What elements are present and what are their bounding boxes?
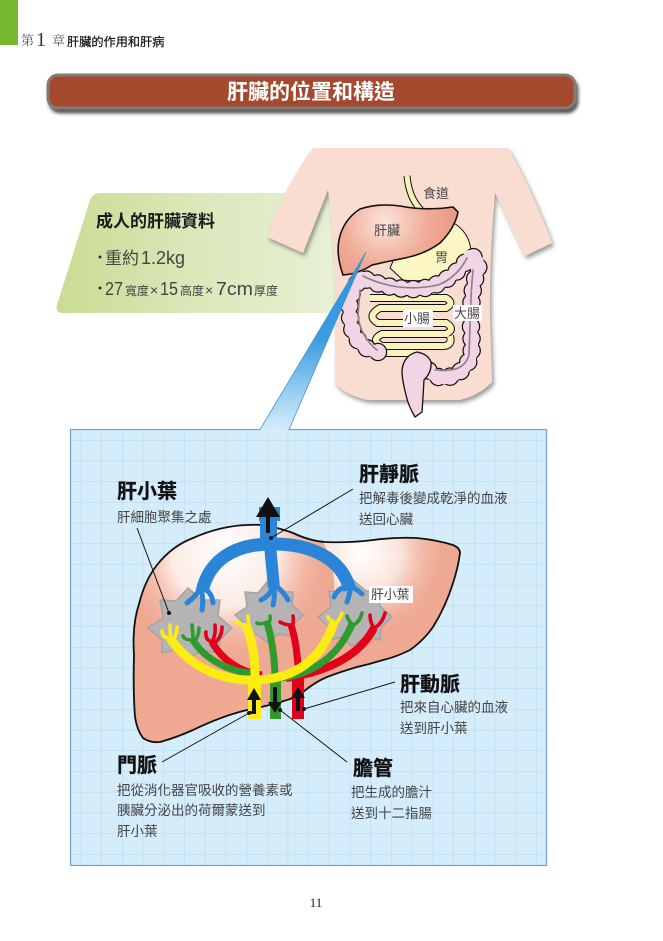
label: bile duct	[351, 756, 432, 821]
size line: 高度	[180, 283, 204, 298]
label: hepatic vein	[359, 463, 508, 527]
panel: liver detail	[70, 252, 546, 866]
lobule: right	[318, 580, 392, 646]
callout wedge from liver	[260, 252, 366, 430]
hepatic vein	[187, 507, 362, 610]
label: hepatic artery: 肝動脈	[400, 673, 460, 696]
vessels: yellow	[162, 613, 342, 719]
heading: adult liver data: 成人的肝臟資料	[96, 211, 215, 231]
chapter heading: 1	[36, 29, 46, 51]
green chapter tab	[0, 0, 18, 45]
organ label: large intestine: 大腸	[454, 306, 480, 321]
label: portal vein: 胰臟分泌出的荷爾蒙送到	[117, 803, 266, 818]
vessels: red	[206, 613, 385, 719]
organ label: small intestine: 小腸	[404, 311, 430, 326]
chapter heading: 肝臟的作用和肝病	[67, 34, 164, 49]
weight line: 1.2kg	[141, 248, 185, 268]
body silhouette	[267, 148, 552, 400]
label: lobule: 肝細胞聚集之處	[117, 510, 212, 525]
rectum	[402, 352, 431, 417]
title banner	[48, 75, 575, 108]
label: bile duct: 膽管	[353, 756, 393, 780]
chapter heading	[21, 29, 164, 51]
label: hepatic artery: 送到肝小葉	[400, 721, 468, 736]
label: portal vein: 把從消化器官吸收的營養素或	[117, 783, 292, 798]
arrow: bile duct down	[268, 687, 282, 713]
size line: 7cm	[216, 279, 253, 299]
label: lobule: 肝小葉	[117, 480, 177, 503]
label: portal vein: 肝小葉	[117, 824, 158, 839]
size line: 厚度	[254, 283, 278, 298]
size line: 15	[160, 279, 178, 299]
organ label: liver: 肝臟	[374, 223, 400, 238]
arrow: hepatic vein up	[256, 497, 280, 533]
label: hepatic vein: 送回心臟	[359, 512, 413, 527]
organ label: esophagus: 食道	[423, 186, 449, 201]
lobule: centre	[235, 582, 303, 642]
small liver	[338, 205, 458, 275]
panel: adult liver data	[57, 193, 345, 313]
size line: ×	[150, 282, 158, 298]
label: bile duct: 把生成的膽汁	[351, 785, 432, 800]
label: hepatic artery: 把來自心臟的血液	[400, 700, 508, 715]
stomach	[390, 222, 471, 281]
weight line: 重約	[105, 249, 139, 268]
organ label: stomach: 胃	[435, 250, 448, 265]
arrow: portal vein up	[247, 688, 261, 714]
small lobule label: 肝小葉	[371, 587, 410, 602]
lobule: left	[148, 588, 232, 660]
panel background	[70, 430, 546, 866]
label: hepatic vein: 肝靜脈	[359, 463, 419, 486]
leader: hepatic vein	[269, 489, 353, 540]
leader: hepatic artery	[302, 682, 395, 711]
label: portal vein	[117, 754, 292, 839]
large liver	[132, 524, 461, 744]
leader: lobule	[137, 528, 171, 615]
label: hepatic vein: 把解毒後變成乾淨的血液	[359, 491, 508, 506]
small intestine	[370, 298, 451, 353]
label: bile duct: 送到十二指腸	[351, 806, 432, 821]
label: lobule	[117, 480, 212, 525]
page number: 11	[310, 895, 322, 910]
label: hepatic artery	[400, 673, 508, 736]
esophagus	[407, 176, 421, 210]
size line	[98, 279, 278, 299]
vessels: green	[183, 613, 362, 719]
arrow: hepatic artery up	[291, 687, 305, 711]
weight line	[98, 248, 185, 268]
size line: 27	[105, 279, 123, 299]
leader: portal vein	[162, 711, 251, 762]
size line: 寬度	[125, 283, 149, 298]
large intestine	[350, 256, 478, 378]
size line: ×	[205, 282, 213, 298]
label: portal vein: 門脈	[117, 754, 157, 777]
leader: bile duct	[278, 708, 347, 762]
chapter heading: 第	[21, 33, 34, 48]
title banner: 肝臟的位置和構造	[227, 80, 395, 104]
torso illustration	[267, 148, 552, 417]
chapter heading: 章	[52, 33, 65, 48]
